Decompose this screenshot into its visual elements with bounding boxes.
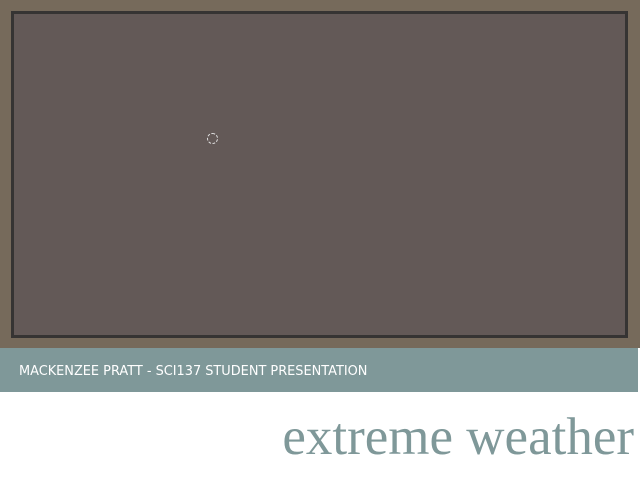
photo panel [11,11,628,338]
background frame [0,0,640,348]
subtitle text: MACKENZEE PRATT - SCI137 STUDENT PRESENTATION [19,364,367,379]
title: extreme weather [282,408,634,466]
icon: loading circle [207,133,218,144]
subtitle band [0,348,638,392]
